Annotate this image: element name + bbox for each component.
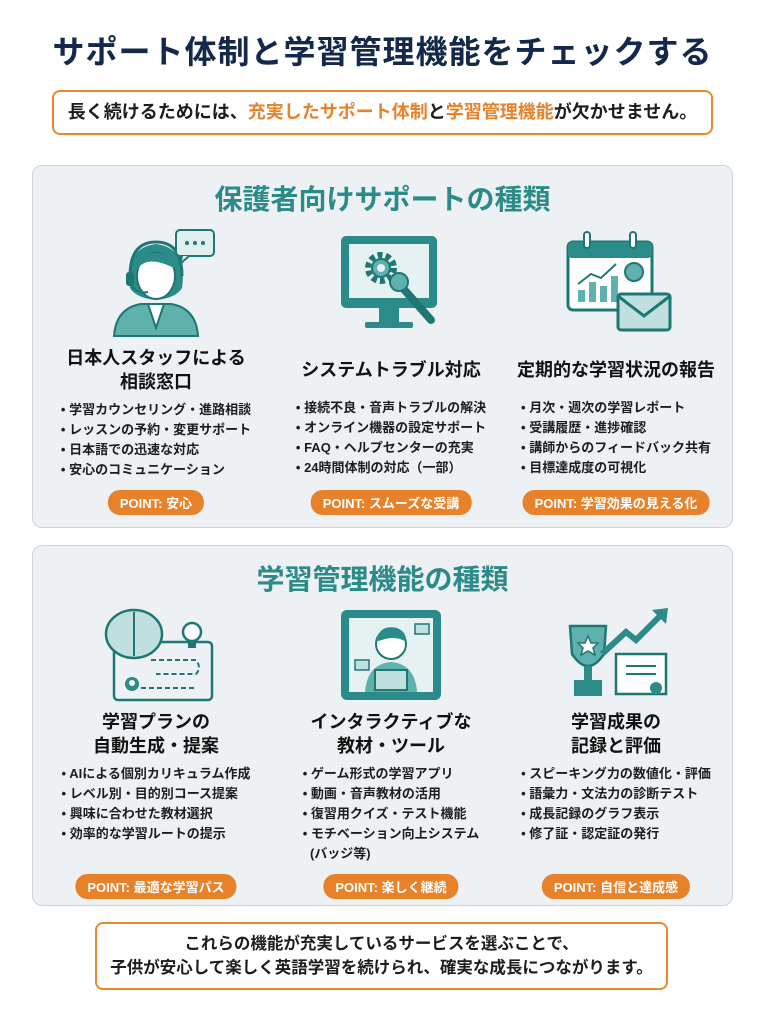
column: records and evaluation xyxy=(522,608,711,899)
bullet list: 動画・音声教材の活用 xyxy=(311,786,441,801)
bullet list: 月次・週次の学習レポート xyxy=(529,400,685,415)
bottom callout: これらの機能が充実しているサービスを選ぶことで、 xyxy=(184,935,579,953)
heading: 記録と評価 xyxy=(571,736,661,756)
heading: 相談窓口 xyxy=(120,372,192,392)
heading xyxy=(93,712,219,756)
heading: 日本人スタッフによる xyxy=(66,348,246,368)
bullet list: 復習用クイズ・テスト機能 xyxy=(311,806,467,821)
heading xyxy=(66,348,246,392)
bullet list: 接続不良・音声トラブルの解決 xyxy=(304,400,486,415)
heading xyxy=(571,712,661,756)
panel heading: support: 保護者向けサポートの種類 xyxy=(214,184,550,215)
icon: calendar chart mail xyxy=(566,231,672,332)
bullet list: レベル別・目的別コース提案 xyxy=(70,786,238,801)
subtitle callout: 長く続けるためには、充実したサポート体制と学習管理機能が欠かせません。 xyxy=(68,102,697,122)
bullet list: 成長記録のグラフ表示 xyxy=(529,806,659,821)
bullet list: AIによる個別カリキュラム作成 xyxy=(69,766,250,781)
bullet list xyxy=(521,400,711,475)
point badge: POINT: 最適な学習パス xyxy=(87,880,225,895)
icon: trophy certificate arrow xyxy=(568,608,668,696)
icon: tablet with child xyxy=(341,610,441,700)
point badge xyxy=(108,490,204,515)
point badge: POINT: 自信と達成感 xyxy=(554,880,678,895)
bullet list: 日本語での迅速な対応 xyxy=(69,442,199,457)
bullet list: (バッジ等) xyxy=(310,846,371,861)
point badge xyxy=(523,490,709,515)
bullet list xyxy=(296,400,486,475)
point badge xyxy=(323,874,459,899)
column: interactive materials xyxy=(303,610,479,899)
column: staff consultation xyxy=(61,229,251,515)
bullet list: 学習カウンセリング・進路相談 xyxy=(69,402,251,417)
bullet list xyxy=(62,766,250,841)
bullet list: モチベーション向上システム xyxy=(311,826,479,841)
bullet list xyxy=(61,402,251,477)
bullet list: 安心のコミュニケーション xyxy=(69,462,225,477)
point badge xyxy=(75,874,237,899)
bullet list: 講師からのフィードバック共有 xyxy=(529,440,711,455)
heading: 学習プランの xyxy=(102,712,210,732)
point badge: POINT: スムーズな受講 xyxy=(323,496,459,511)
bullet list: 修了証・認定証の発行 xyxy=(529,826,659,841)
bullet list: 語彙力・文法力の診断テスト xyxy=(529,786,698,801)
bullet list: 興味に合わせた教材選択 xyxy=(70,806,213,821)
bullet list: ゲーム形式の学習アプリ xyxy=(311,766,454,781)
heading: 定期的な学習状況の報告 xyxy=(517,360,715,380)
panel heading: management: 学習管理機能の種類 xyxy=(256,564,508,595)
bullet list: レッスンの予約・変更サポート xyxy=(69,422,251,437)
bullet list xyxy=(303,766,479,861)
panel: learning management xyxy=(32,545,733,906)
point badge: POINT: 楽しく継続 xyxy=(335,880,447,895)
point badge xyxy=(542,874,690,899)
column: system trouble xyxy=(296,236,486,515)
bottom callout: 子供が安心して楽しく英語学習を続けられ、確実な成長につながります。 xyxy=(110,959,653,977)
icon: brain and route xyxy=(104,608,214,702)
bullet list: 効率的な学習ルートの提示 xyxy=(70,826,226,841)
heading: 学習成果の xyxy=(571,712,661,732)
bottom callout xyxy=(95,922,668,990)
bullet list: オンライン機器の設定サポート xyxy=(304,420,486,435)
point badge: POINT: 学習効果の見える化 xyxy=(535,496,697,511)
bullet list: 目標達成度の可視化 xyxy=(529,460,646,475)
heading xyxy=(311,712,471,756)
heading: 教材・ツール xyxy=(337,736,445,756)
icon: monitor with gear xyxy=(341,236,437,328)
column: learning plan xyxy=(62,608,250,899)
heading: システムトラブル対応 xyxy=(301,360,481,380)
icon: operator xyxy=(112,229,215,337)
bullet list: スピーキング力の数値化・評価 xyxy=(529,766,711,781)
bullet list: FAQ・ヘルプセンターの充実 xyxy=(304,440,474,455)
panel: parent support xyxy=(32,165,733,528)
bullet list xyxy=(522,766,711,841)
bullet list: 受講履歴・進捗確認 xyxy=(529,420,646,435)
point badge: POINT: 安心 xyxy=(120,496,192,511)
heading: インタラクティブな xyxy=(311,712,471,732)
column: reports xyxy=(517,231,715,515)
bullet list: 24時間体制の対応（一部） xyxy=(304,460,462,475)
point badge xyxy=(311,490,471,515)
subtitle callout xyxy=(52,90,713,135)
heading: 自動生成・提案 xyxy=(93,736,219,756)
title: サポート体制と学習管理機能をチェックする xyxy=(52,34,712,70)
